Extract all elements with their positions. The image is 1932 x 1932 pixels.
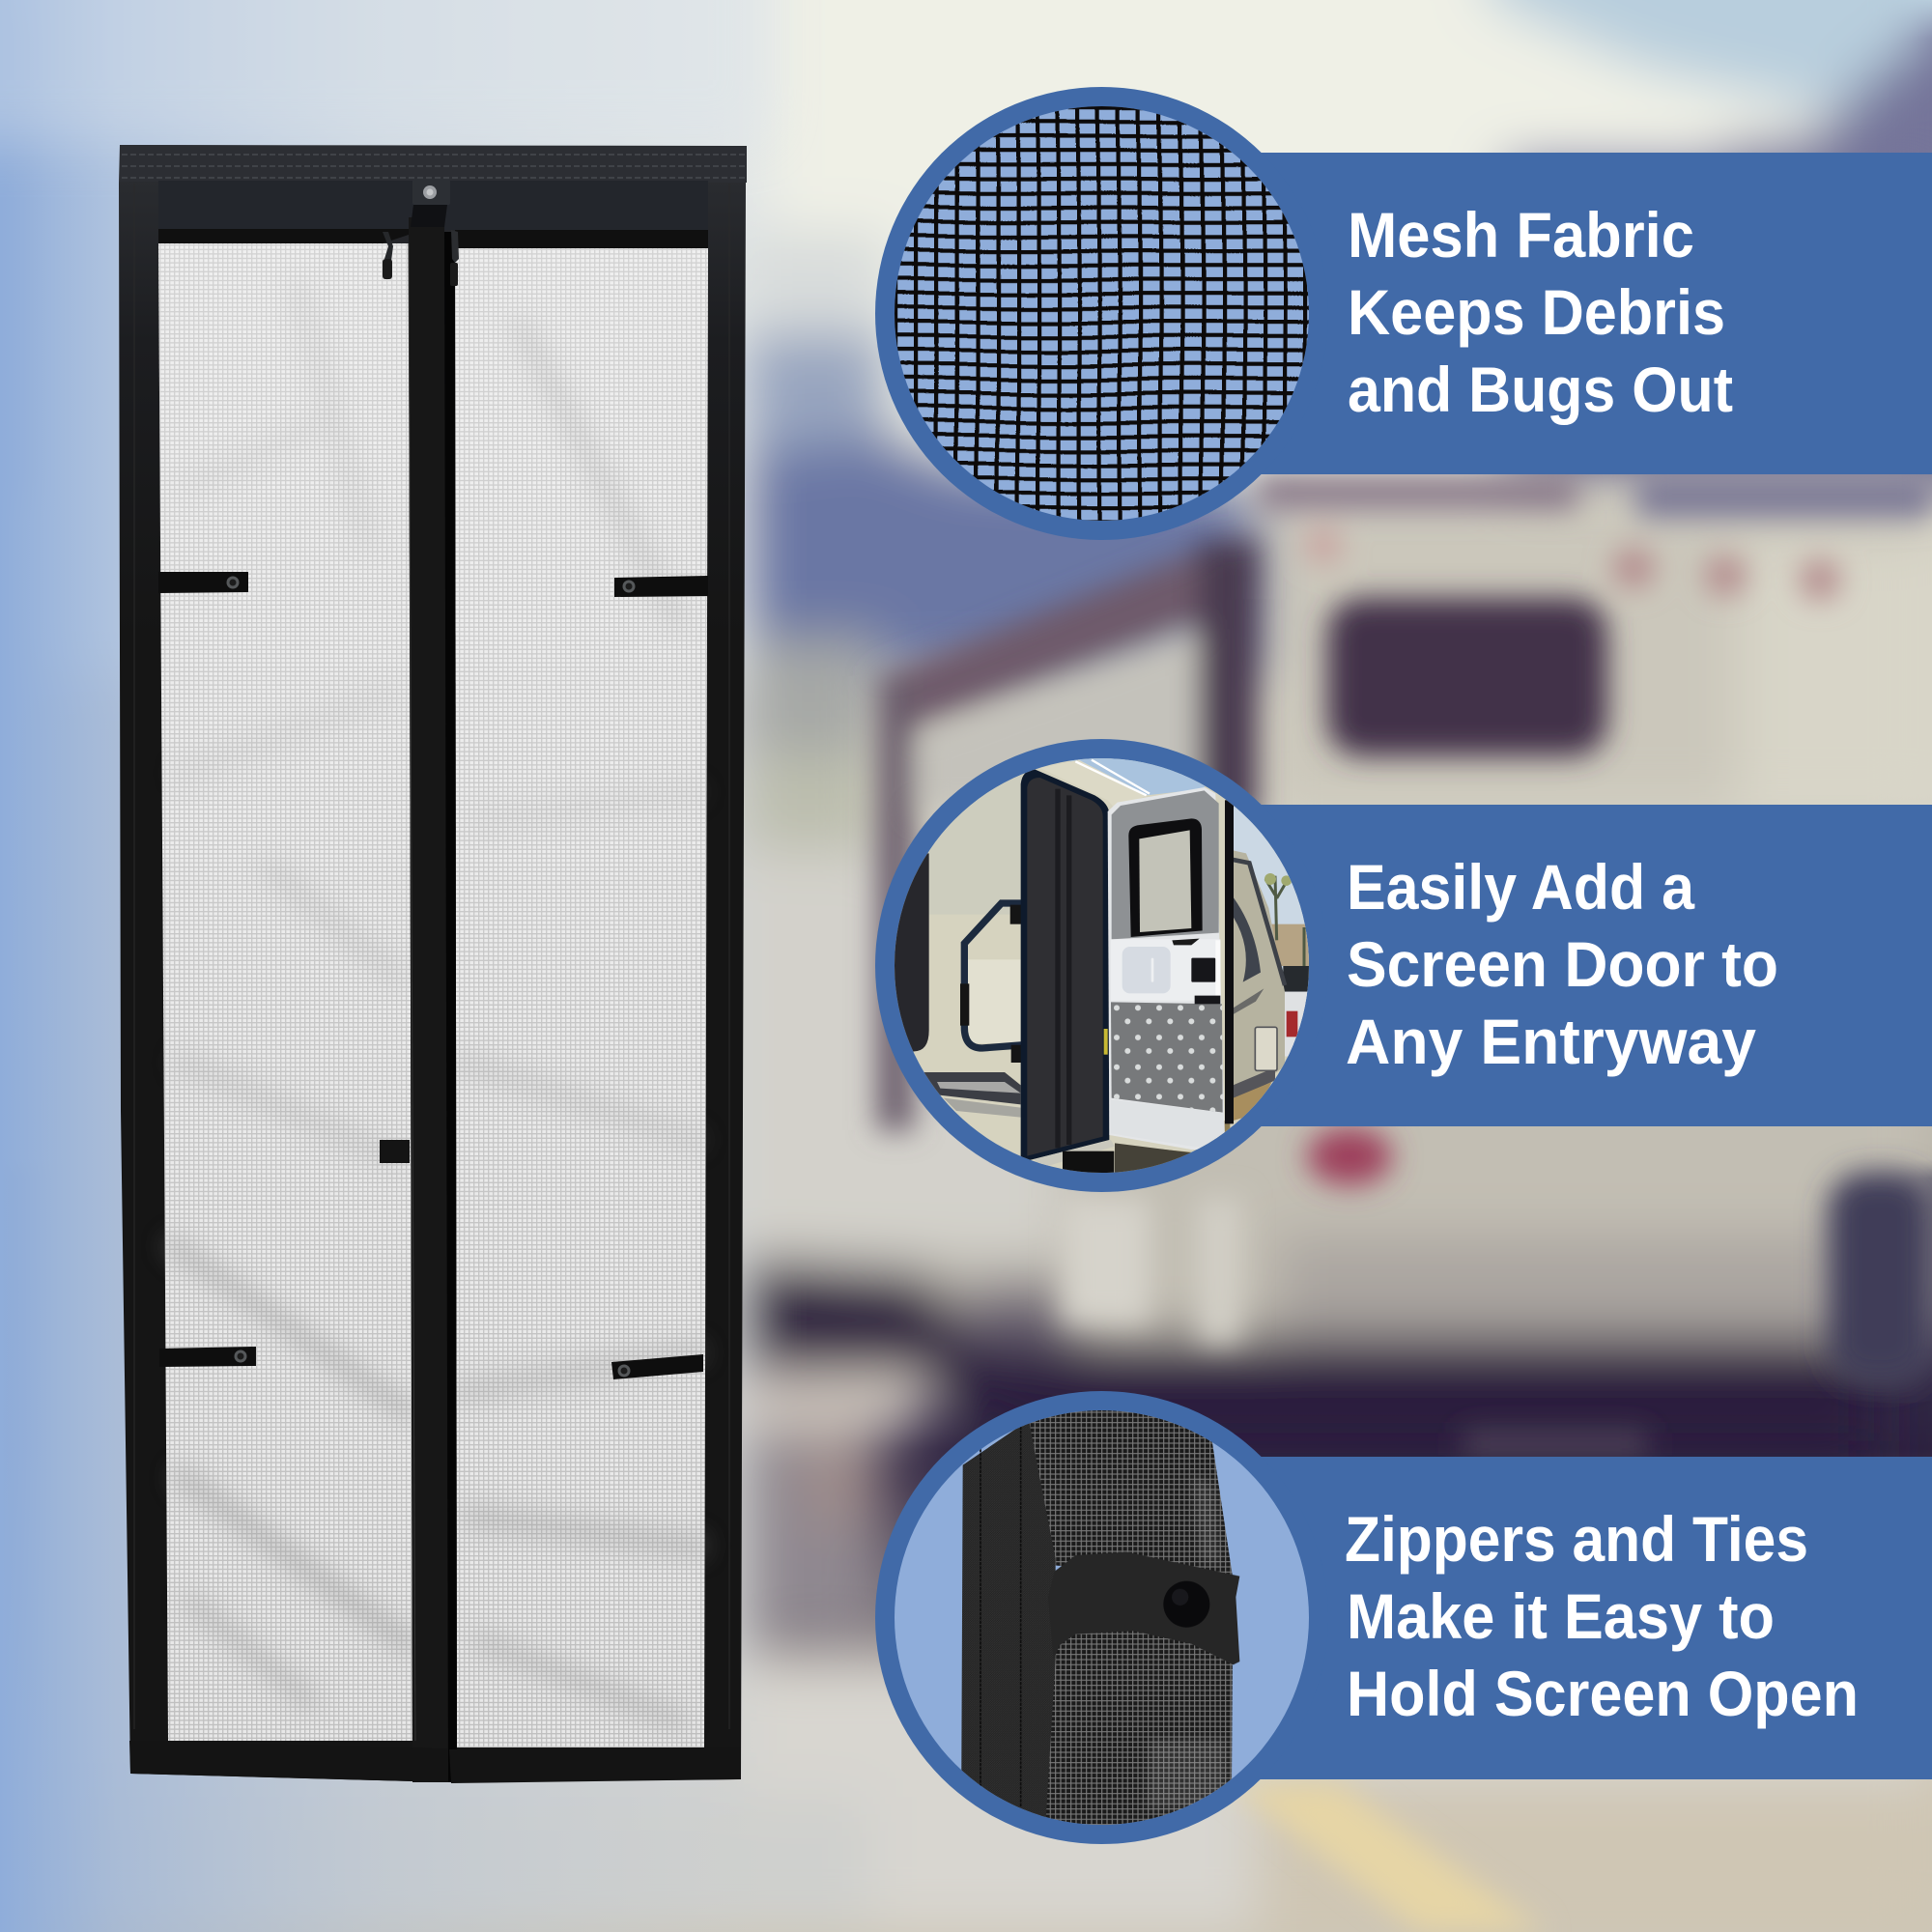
tie strap upper left (158, 572, 248, 593)
heading 3: Hold Screen Open (1347, 1658, 1859, 1729)
bottom hem (129, 1741, 741, 1783)
mesh wrinkles (174, 290, 696, 1719)
banner 3 (1246, 1457, 1932, 1779)
photo: rolled screen and tie (889, 1404, 1314, 1835)
photo: RV door with screen (889, 753, 1314, 1179)
callout 2: screen door on RV (875, 739, 1932, 1192)
top hem and header band (120, 145, 747, 1729)
heading 2: Any Entryway (1346, 1006, 1756, 1077)
zipper pull right (450, 230, 459, 286)
heading 2 (1346, 851, 1778, 1077)
heading 3: Zippers and Ties (1345, 1503, 1808, 1575)
circle ring 2 (875, 739, 1328, 1192)
heading 1 (1348, 199, 1733, 425)
banner 2 (1246, 805, 1932, 1126)
tie strap upper right (614, 576, 708, 597)
heading 3 (1345, 1503, 1859, 1729)
icon: top snap (423, 185, 437, 199)
left mesh panel (158, 243, 412, 1741)
product: zippered screen door (119, 145, 747, 1783)
heading 1: Keeps Debris (1348, 276, 1725, 348)
heading 1: and Bugs Out (1348, 354, 1733, 425)
heading 2: Screen Door to (1347, 928, 1778, 1000)
banner 1 (1246, 153, 1932, 474)
heading 2: Easily Add a (1347, 851, 1695, 923)
center tab (380, 1140, 410, 1163)
photo: mesh close-up (895, 106, 1309, 521)
circle ring 3 (875, 1391, 1328, 1844)
right mesh panel (455, 248, 708, 1747)
heading 1: Mesh Fabric (1348, 199, 1694, 270)
tie strap lower right (611, 1354, 703, 1379)
tie strap lower left (159, 1347, 256, 1367)
callout 1: mesh fabric (869, 87, 1932, 541)
door frame (119, 145, 747, 1782)
center flap and zipper (409, 179, 457, 1782)
circle ring 1 (875, 87, 1328, 540)
zipper strips (158, 229, 708, 248)
heading 3: Make it Easy to (1347, 1580, 1775, 1652)
callout 3: zippers and ties (875, 1391, 1932, 1844)
zipper pull left (383, 232, 393, 279)
